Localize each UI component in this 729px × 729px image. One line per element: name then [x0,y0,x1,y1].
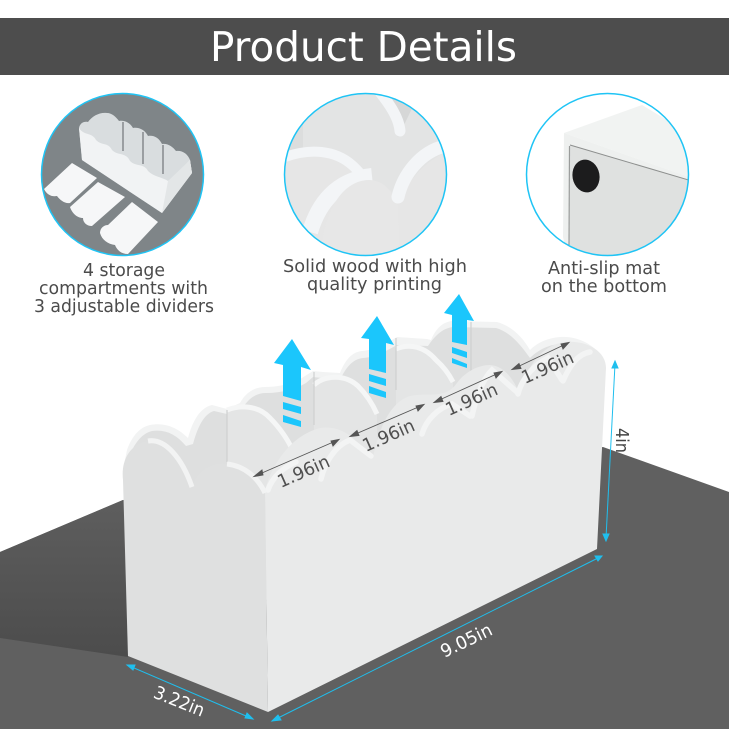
photo: scallop close-up [284,92,448,260]
icon: blue up arrow 1 [274,339,311,427]
label: 1.96in: 1.96in [518,347,577,389]
dimension: compartment widths [254,342,569,476]
caption: quality printing [307,274,442,295]
caption: compartments with [39,278,208,299]
panel: solid wood [283,92,467,295]
caption: 3 adjustable dividers [34,296,214,317]
caption: Anti-slip mat [548,258,660,279]
side face [123,441,268,712]
photo: box with dividers [40,92,206,258]
icon: blue up arrow 3 [444,294,474,368]
dimension: depth arrow [127,665,253,719]
front face [265,342,606,712]
label: 1.96in: 1.96in [274,451,333,493]
panel: anti-slip mat [526,92,692,297]
label: 1.96in: 1.96in [359,415,418,457]
photo: box underside with rubber foot [563,105,688,255]
divider panels [227,322,471,490]
title: Product Details [210,23,517,71]
dimension: height arrow [603,361,618,541]
caption: Solid wood with high [283,256,467,277]
back wall [123,321,600,600]
interior walls [130,327,596,600]
panel: storage compartments [34,92,214,317]
top rim highlights [268,352,590,490]
label: 4in: 4in [611,428,632,453]
white scalloped box [123,321,606,712]
label: 1.96in: 1.96in [442,379,501,421]
dark floor surface [0,447,729,729]
label: 3.22in: 3.22in [151,682,208,722]
caption: 4 storage [83,260,165,281]
dimension: length arrow [272,556,602,721]
icon: blue up arrow 2 [361,316,394,398]
label: 9.05in: 9.05in [437,620,496,663]
caption: on the bottom [541,276,667,297]
header banner [0,18,729,75]
